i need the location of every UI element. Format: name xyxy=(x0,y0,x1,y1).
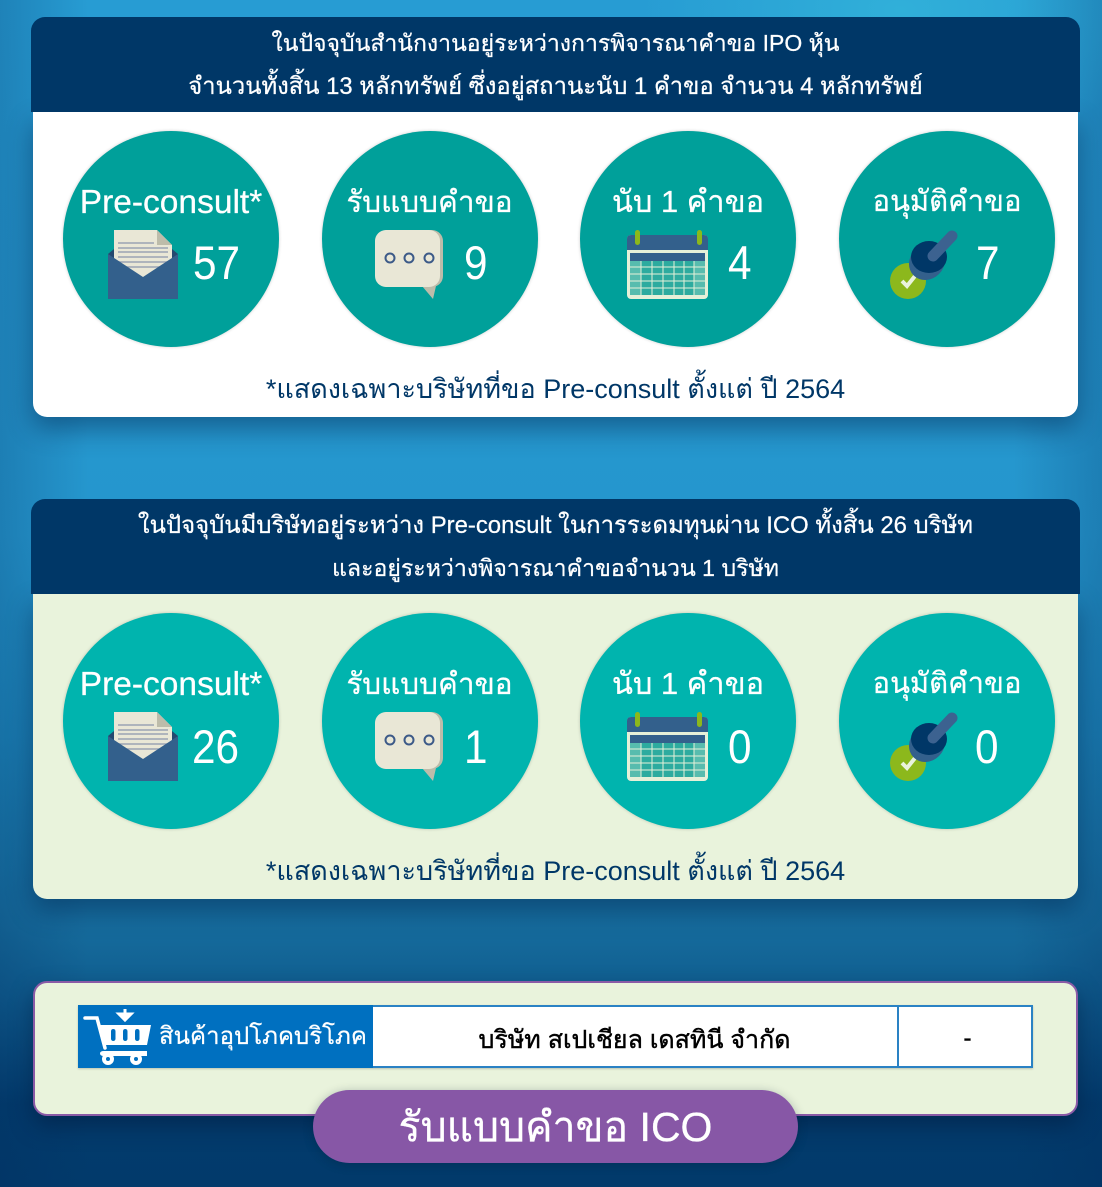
ICO panel body xyxy=(33,594,1078,899)
number: 7 xyxy=(976,236,1000,289)
circle: IPO approved xyxy=(839,131,1055,347)
icon: shopping cart xyxy=(83,1009,151,1065)
icon: speech bubble xyxy=(375,230,443,299)
footnote: *แสดงเฉพาะบริษัทที่ขอ Pre-consult ตั้งแต่ ปี 2564 xyxy=(266,374,845,404)
number: 9 xyxy=(464,236,487,289)
label: รับแบบคำขอ xyxy=(346,186,513,219)
category cell xyxy=(78,1005,373,1068)
ICO header line 1: ในปัจจุบันมีบริษัทอยู่ระหว่าง Pre-consult ในการระดมทุนผ่าน ICO ทั้งสิ้น 26 บริษัท xyxy=(138,512,973,539)
circle: IPO received xyxy=(322,131,538,347)
icon: calendar xyxy=(627,712,708,781)
circle: IPO Pre-consult xyxy=(63,131,279,347)
cell divider and status cell xyxy=(897,1005,1032,1068)
panel: IPO status xyxy=(20,17,1092,444)
panel: ICO filing list xyxy=(33,981,1078,1116)
table row xyxy=(78,1005,1033,1068)
ICO header banner xyxy=(31,499,1080,594)
label: อนุมัติคำขอ xyxy=(872,668,1022,700)
label: นับ 1 คำขอ xyxy=(612,666,764,701)
icon: approval stamp xyxy=(890,230,958,299)
IPO header line 1: ในปัจจุบันสำนักงานอยู่ระหว่างการพิจารณาคำขอ IPO หุ้น xyxy=(272,30,840,56)
number: 4 xyxy=(728,236,752,289)
icon: envelope xyxy=(108,712,178,781)
label: Pre-consult* xyxy=(80,666,262,703)
ICO header line 2: และอยู่ระหว่างพิจารณาคำขอจำนวน 1 บริษัท xyxy=(332,555,779,581)
circle: ICO approved xyxy=(839,613,1055,829)
number: 57 xyxy=(193,236,240,289)
circle: ICO filing count xyxy=(580,613,796,829)
number: 0 xyxy=(728,720,752,773)
pill text: รับแบบคำขอ ICO xyxy=(399,1104,712,1150)
icon: envelope xyxy=(108,230,178,299)
circle: ICO Pre-consult xyxy=(63,613,279,829)
number: 26 xyxy=(192,720,239,773)
company name cell: บริษัท สเปเชียล เดสทินี จำกัด xyxy=(479,1026,790,1054)
IPO header line 2: จำนวนทั้งสิ้น 13 หลักทรัพย์ ซึ่งอยู่สถานะนับ 1 คำขอ จำนวน 4 หลักทรัพย์ xyxy=(188,73,923,100)
label: อนุมัติคำขอ xyxy=(872,186,1022,218)
icon: approval stamp xyxy=(890,712,958,781)
icon: calendar xyxy=(627,230,708,299)
number: 1 xyxy=(464,720,487,773)
IPO panel body xyxy=(33,112,1078,417)
footnote: *แสดงเฉพาะบริษัทที่ขอ Pre-consult ตั้งแต่ ปี 2564 xyxy=(266,856,845,886)
label: รับแบบคำขอ xyxy=(346,668,513,701)
icon: speech bubble xyxy=(375,712,443,781)
category label: สินค้าอุปโภคบริโภค xyxy=(159,1023,367,1050)
pill: ICO filing heading xyxy=(313,1090,798,1163)
circle: ICO received xyxy=(322,613,538,829)
label: Pre-consult* xyxy=(80,184,262,221)
status value: - xyxy=(964,1025,972,1052)
circle: IPO filing count xyxy=(580,131,796,347)
IPO header banner xyxy=(31,17,1080,112)
label: นับ 1 คำขอ xyxy=(612,184,764,219)
panel: ICO status xyxy=(20,499,1090,922)
number: 0 xyxy=(975,720,999,773)
